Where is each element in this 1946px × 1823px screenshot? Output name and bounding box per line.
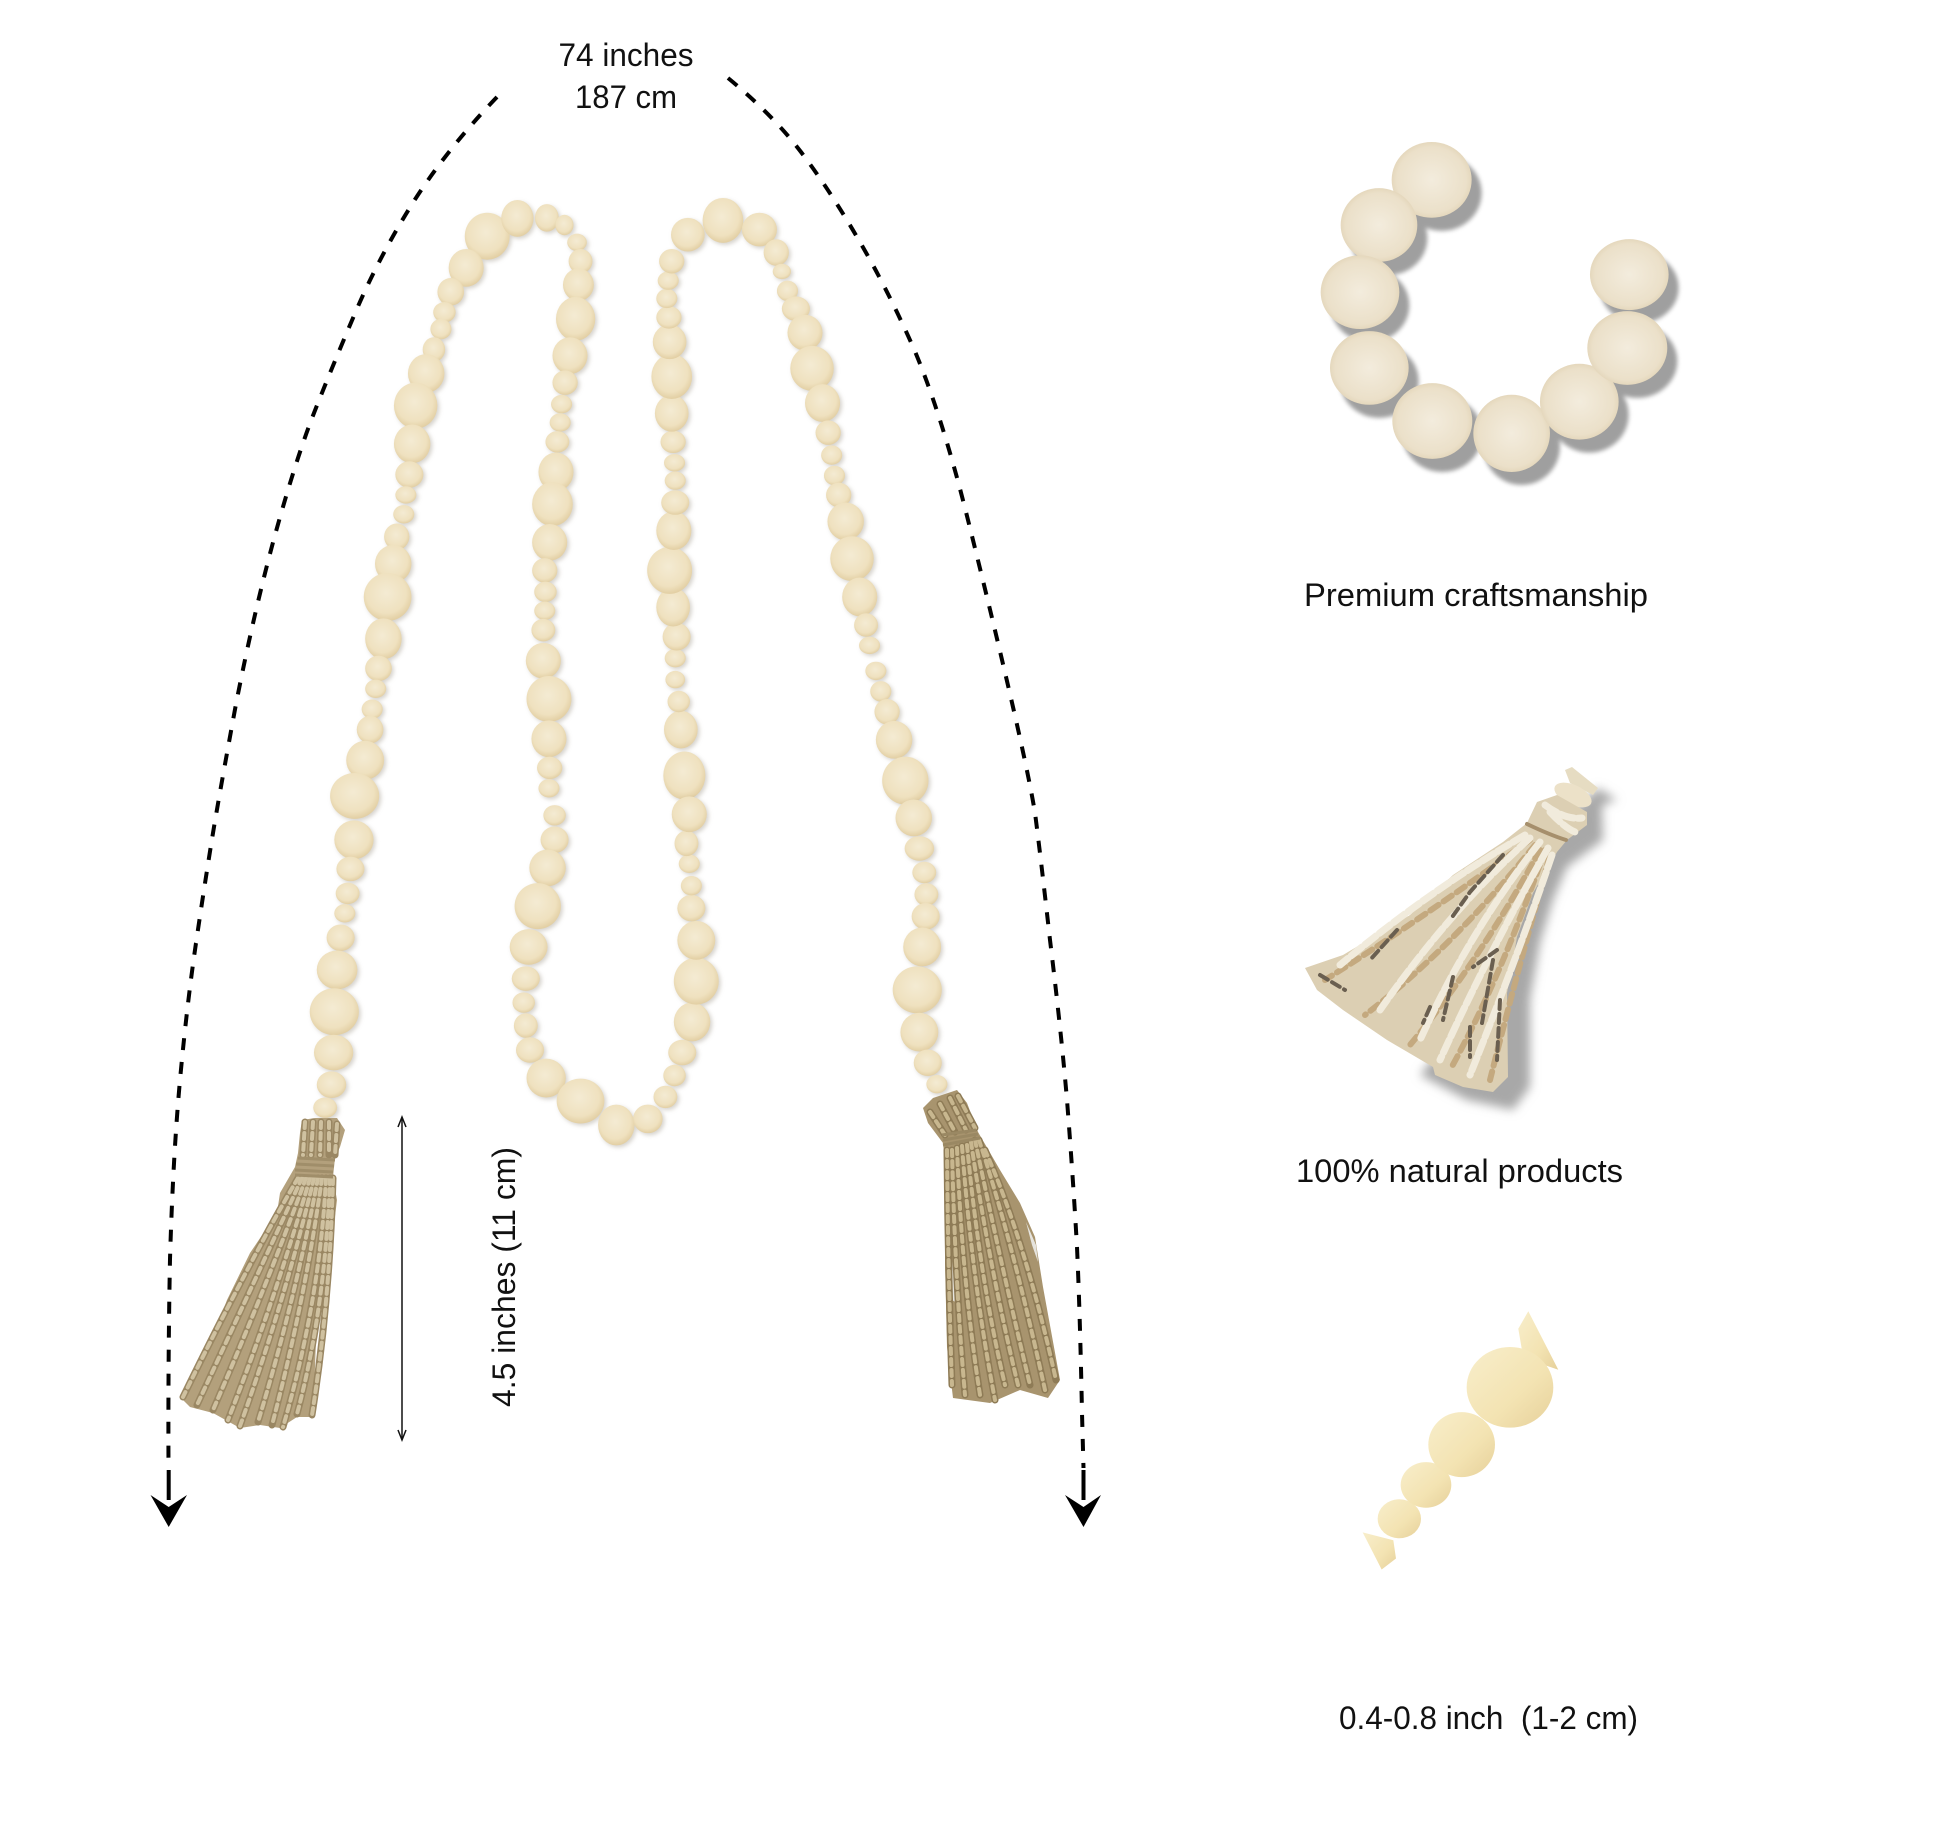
label: tassel length: 4.5 inches (11 cm) xyxy=(486,1147,522,1407)
photo: close-up jute tassel with shadow xyxy=(1305,767,1617,1110)
photo: four graded wooden beads xyxy=(1363,1311,1558,1570)
thin double-headed arrow: tassel length xyxy=(398,1117,406,1440)
photo: wooden bead arc with shadow xyxy=(1321,142,1679,485)
heading: total length label xyxy=(558,37,694,115)
left jute tassel xyxy=(180,1118,345,1428)
arrow: right dashed length curve xyxy=(728,78,1101,1527)
caption: premium craftsmanship: Premium craftsmanship xyxy=(1304,577,1648,613)
heading: total length label: 74 inches xyxy=(558,37,694,73)
bead garland upper section xyxy=(330,198,928,819)
arrow: left dashed length curve xyxy=(150,97,497,1527)
caption: bead size: 0.4-0.8 inch (1-2 cm) xyxy=(1339,1700,1638,1736)
heading: total length label: 187 cm xyxy=(575,79,677,115)
bead garland lower section xyxy=(310,796,947,1145)
right jute tassel xyxy=(923,1090,1060,1403)
caption: natural products: 100% natural products xyxy=(1296,1153,1623,1189)
